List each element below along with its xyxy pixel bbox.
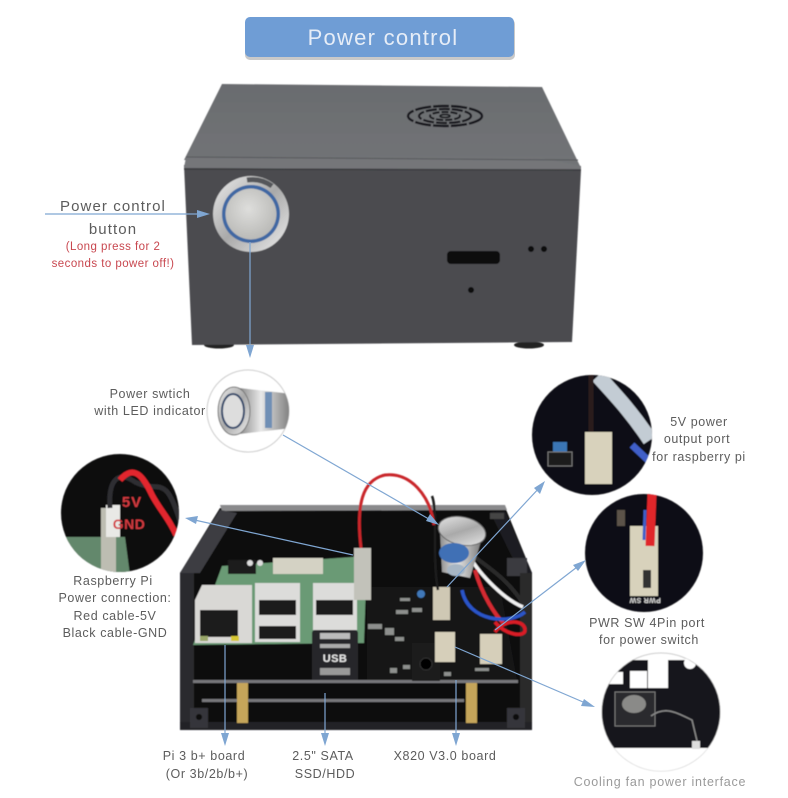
enclosure front face [184, 165, 581, 345]
power control button [213, 176, 289, 252]
PWR SW port label: PWR SW 4Pin port [589, 616, 705, 630]
arrow: to cooling fan [455, 647, 595, 707]
5V output label: 5V power [670, 415, 728, 429]
wiring [359, 475, 525, 634]
right wall [490, 511, 532, 573]
Raspberry Pi power connection circle: 5V [122, 494, 142, 511]
raspberry pi board [193, 556, 367, 645]
Raspberry Pi power connection label [58, 574, 172, 640]
side slot and holes [447, 246, 547, 293]
arrow: to X820 board [452, 680, 460, 746]
cooling fan label: Cooling fan power interface [574, 775, 746, 789]
DC jack [412, 643, 440, 681]
enclosure top face [184, 84, 581, 168]
callout arrows [45, 210, 595, 746]
USB sticker: USB [323, 653, 347, 665]
power control button label: seconds to power off!) [52, 258, 174, 270]
lid lip [184, 157, 581, 170]
enclosure feet [204, 342, 234, 348]
power control button label: Power control [60, 198, 166, 215]
5V output label: output port [664, 432, 730, 446]
bottom labels: Pi 3 b+ board [163, 749, 245, 763]
board connectors [433, 587, 450, 620]
5V output label: for raspberry pi [652, 450, 746, 464]
frame [180, 573, 194, 730]
Raspberry Pi power connection circle: GND [113, 516, 145, 532]
Pi power connector [354, 548, 371, 600]
switch detail circle [207, 370, 292, 452]
left wall [180, 510, 237, 573]
Raspberry Pi power connection circle [60, 454, 181, 578]
switch label [93, 387, 206, 418]
Raspberry Pi power connection label: Raspberry Pi [73, 574, 153, 588]
bottom labels: X820 V3.0 board [394, 749, 496, 763]
arrow: to power button [45, 210, 210, 218]
arrow: to SSD [321, 693, 329, 746]
cooling fan circle [600, 653, 722, 778]
PWR SW port label: for power switch [599, 633, 699, 647]
power control button label: (Long press for 2 [66, 241, 160, 253]
arrow: button to switch [246, 242, 254, 358]
fan vent [408, 106, 482, 126]
arrow: to Pi board [221, 645, 229, 746]
black PCB [367, 587, 517, 680]
USB ports [255, 583, 357, 642]
open enclosure photo [180, 475, 532, 730]
Raspberry Pi power connection label: Red cable-5V [74, 609, 157, 623]
switch label: with LED indicator [93, 404, 206, 418]
power control button label [52, 198, 174, 270]
bottom labels [163, 749, 496, 781]
title button [245, 17, 515, 60]
bottom labels: (Or 3b/2b/b+) [166, 767, 248, 781]
Raspberry Pi power connection label: Power connection: [58, 591, 172, 605]
closed enclosure photo [184, 84, 581, 348]
wired power switch [436, 512, 488, 578]
ethernet port [195, 585, 252, 643]
power control button label: button [89, 221, 137, 238]
Raspberry Pi power connection label: Black cable-GND [63, 626, 167, 640]
arrow: to Pi power connection [185, 516, 353, 555]
switch label: Power swtich [110, 387, 190, 401]
arrow: switch to wired switch [283, 435, 439, 525]
5V output circle [532, 375, 652, 495]
USB sticker [312, 630, 358, 683]
bottom labels: 2.5" SATA [292, 749, 354, 763]
drive plate and rails [193, 680, 518, 683]
PWR SW port circle [585, 494, 703, 612]
arrow: to PWR SW port [495, 560, 586, 630]
title button: Power control [308, 25, 458, 50]
brass standoffs [237, 683, 248, 723]
5V output label [652, 415, 746, 464]
PWR SW port circle: PWR SW [629, 596, 661, 603]
bottom labels: SSD/HDD [295, 767, 355, 781]
arrow: to 5V output [447, 481, 545, 587]
corner tabs [190, 708, 208, 728]
PWR SW port label [589, 616, 705, 647]
interior [180, 507, 532, 730]
